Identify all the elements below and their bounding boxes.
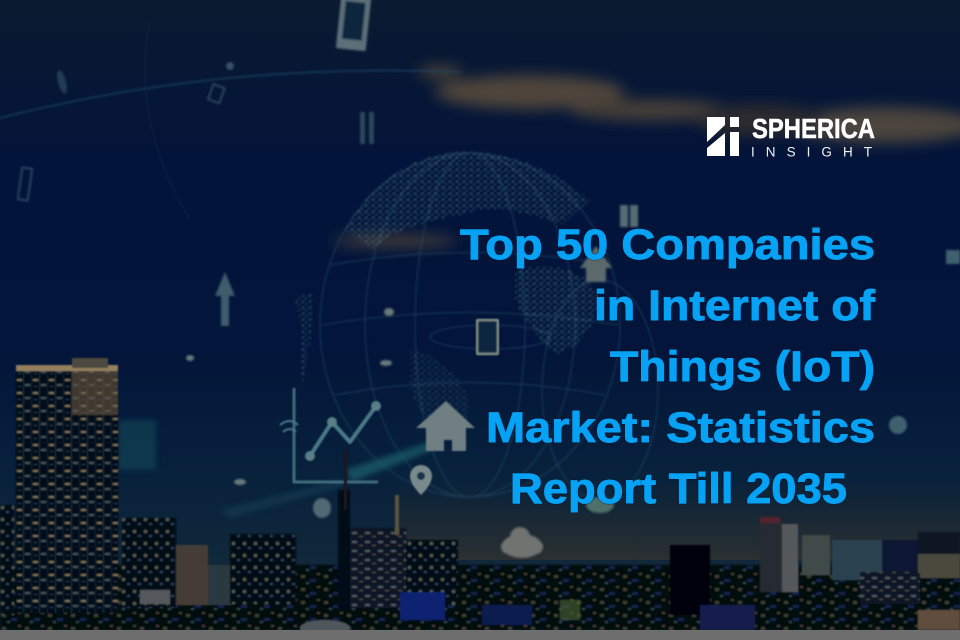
logo tagline: INSIGHT bbox=[751, 144, 872, 160]
icon: phone in globe bbox=[477, 320, 498, 354]
title: Market: Statistics bbox=[486, 404, 875, 452]
line chart icon bbox=[280, 388, 381, 482]
title: in Internet of bbox=[594, 282, 876, 330]
icon: tablet bbox=[336, 0, 371, 51]
map pin icon bbox=[410, 465, 432, 495]
house icon bbox=[416, 401, 475, 451]
main tower bbox=[16, 358, 118, 613]
up arrow icon bbox=[215, 272, 235, 326]
clouds bbox=[333, 66, 960, 246]
title: Top 50 Companies bbox=[460, 221, 875, 269]
small floating icons bbox=[18, 62, 374, 201]
title bbox=[460, 221, 876, 513]
logo: Spherica Insight bbox=[707, 113, 875, 160]
teal light streak bbox=[118, 420, 432, 518]
small glyph dots bbox=[186, 250, 960, 485]
cloud icons bbox=[313, 497, 614, 558]
bottom grey strip bbox=[0, 630, 960, 640]
network arc across the sky bbox=[0, 20, 460, 220]
logo mark bbox=[707, 117, 739, 156]
title: Things (IoT) bbox=[610, 343, 875, 391]
logo wordmark: SPHERICA bbox=[752, 113, 875, 144]
city skyline bbox=[0, 358, 960, 636]
globe network bbox=[295, 152, 658, 500]
title: Report Till 2035 bbox=[510, 465, 847, 513]
